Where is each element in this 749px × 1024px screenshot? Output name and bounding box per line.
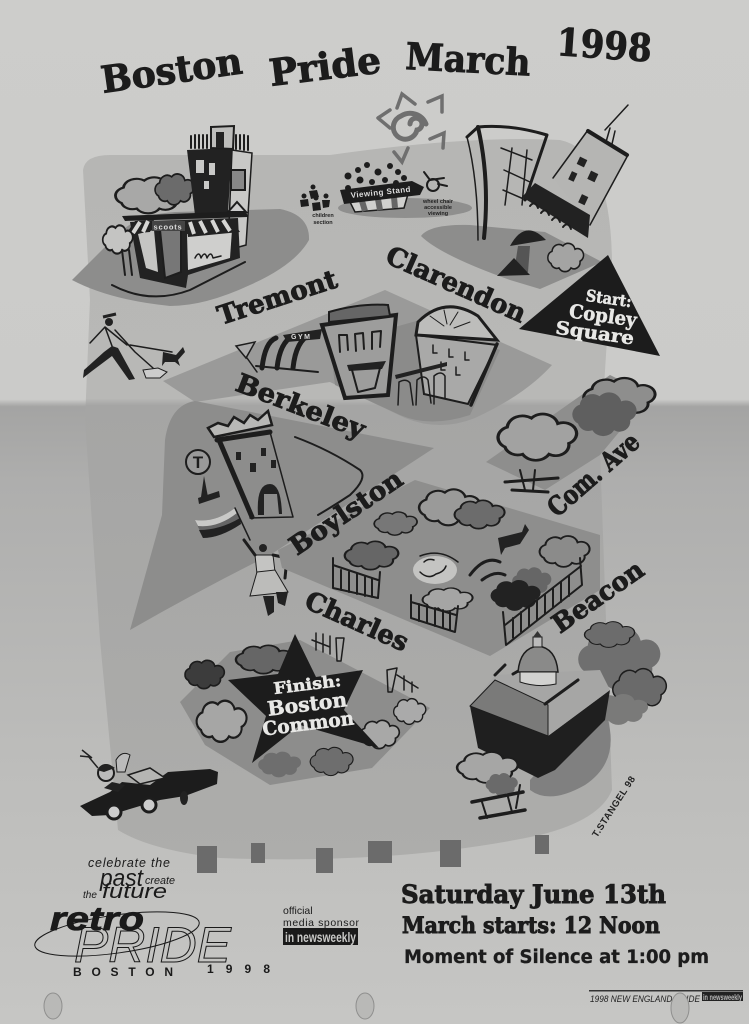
trees right — [578, 622, 666, 725]
tower — [187, 126, 252, 250]
station building — [217, 431, 293, 518]
street: Charles: Charles — [300, 586, 413, 658]
street: Berkeley: Berkeley — [231, 369, 370, 446]
media sponsor: official — [283, 905, 313, 917]
parade blocks — [197, 835, 549, 873]
ground — [180, 640, 430, 785]
crown — [208, 411, 272, 437]
panel: viewing stand — [300, 162, 472, 226]
icon: convertible car — [80, 750, 218, 819]
slogan: create — [145, 875, 175, 887]
arched building — [395, 307, 497, 405]
children section label: children — [312, 213, 334, 219]
swan boat — [413, 553, 458, 584]
slogan: past — [99, 865, 144, 892]
panel: gym block — [163, 290, 552, 425]
gym building: GYM — [291, 334, 311, 341]
gym building — [236, 329, 322, 372]
street: Com. Ave: Com. Ave — [542, 427, 646, 523]
accessible viewing note: wheel chair — [422, 199, 454, 205]
fence middle — [411, 595, 458, 632]
square tower — [553, 130, 628, 225]
ground — [72, 209, 309, 306]
event details: March starts: 12 Noon — [402, 913, 660, 939]
event details — [401, 880, 709, 968]
statue — [510, 230, 546, 246]
event details: Saturday June 13th — [401, 880, 666, 909]
callout: finish star: Common — [261, 707, 355, 741]
shop front: scoots — [154, 222, 182, 232]
shop front — [122, 211, 248, 288]
panel: public garden — [278, 480, 600, 656]
slogan: future — [102, 881, 167, 903]
callout: finish star — [228, 634, 379, 763]
slogan: celebrate the — [88, 856, 170, 870]
building — [470, 665, 610, 778]
panel: scoots storefront block — [72, 126, 309, 306]
callout: finish star: Boston — [266, 687, 349, 721]
fence right — [503, 558, 582, 645]
accessible viewing note: viewing — [428, 211, 448, 217]
figure: kilted marcher — [244, 540, 288, 616]
title: March — [405, 34, 532, 85]
ground — [278, 480, 600, 656]
fence left — [333, 558, 380, 598]
panel: com ave trees — [486, 375, 655, 492]
event details: Moment of Silence at 1:00 pm — [404, 947, 709, 968]
street labels — [214, 241, 650, 658]
retro pride logo: BOSTON — [73, 965, 173, 979]
icon: wheelchair — [424, 172, 447, 191]
panel: state house — [457, 622, 666, 818]
children section label — [312, 213, 334, 226]
center building — [322, 305, 396, 398]
street: Clarendon: Clarendon — [381, 241, 530, 329]
street: Beacon: Beacon — [547, 555, 650, 640]
trees — [345, 489, 590, 611]
title: Pride — [267, 38, 383, 95]
artist signature: T.STANGEL 98 — [590, 774, 638, 840]
icon: dog walker — [83, 314, 185, 380]
footer credit: 1998 NEW ENGLAND PRIDE — [590, 994, 701, 1004]
callout: start — [519, 255, 660, 356]
callout: start: Square — [554, 318, 635, 349]
curved tower — [467, 126, 547, 200]
accessible viewing note — [422, 199, 454, 217]
panel: skyscrapers — [421, 105, 628, 289]
retro pride logo: 1998 — [207, 962, 270, 976]
ground — [486, 375, 650, 490]
front tree and bench — [457, 752, 525, 818]
pride flag — [195, 508, 250, 540]
callout: finish star: Finish: — [272, 671, 342, 698]
street: Boylston: Boylston — [284, 464, 409, 562]
callout: start: Start: — [585, 286, 633, 311]
trees around star — [185, 645, 426, 777]
low roof — [522, 183, 590, 238]
title — [98, 19, 653, 102]
small tree — [548, 243, 584, 272]
callout: start: Copley — [568, 300, 639, 332]
retro pride logo: retro — [50, 900, 144, 937]
panel: T station block — [130, 401, 434, 630]
icon: sun — [378, 94, 444, 162]
staple holes — [44, 993, 689, 1023]
children section label: section — [313, 220, 333, 226]
dome — [518, 631, 558, 686]
ground — [130, 401, 434, 630]
ground — [421, 225, 602, 289]
icon: children — [300, 184, 330, 211]
shadow ground — [530, 700, 611, 796]
tree behind shop — [115, 177, 183, 213]
dog statue and bridge — [470, 524, 529, 580]
slogan — [83, 856, 175, 903]
stand — [350, 194, 408, 212]
media sponsor — [283, 905, 360, 945]
accessible viewing note: accessible — [424, 205, 452, 211]
icon: T stop sign: T — [193, 453, 204, 472]
slogan: the — [83, 890, 97, 901]
footer credit — [589, 990, 743, 1004]
media sponsor: in newsweekly — [285, 929, 356, 945]
panel: finish common — [180, 633, 430, 785]
ground — [163, 290, 552, 425]
small street tree — [103, 225, 133, 275]
crowd dots — [344, 162, 407, 191]
retro pride logo — [32, 900, 270, 979]
dark tree foliage — [155, 174, 194, 205]
map base shape — [83, 139, 612, 859]
media sponsor: media sponsor — [283, 917, 360, 929]
banner — [340, 181, 424, 204]
retro pride logo: PRIDE — [74, 917, 232, 973]
lamps and fences — [312, 633, 418, 692]
icon: T stop sign — [186, 450, 220, 504]
title: Boston — [98, 39, 245, 102]
title: 1998 — [555, 19, 653, 71]
banner: Viewing Stand — [350, 185, 411, 200]
street: Tremont: Tremont — [214, 265, 341, 332]
